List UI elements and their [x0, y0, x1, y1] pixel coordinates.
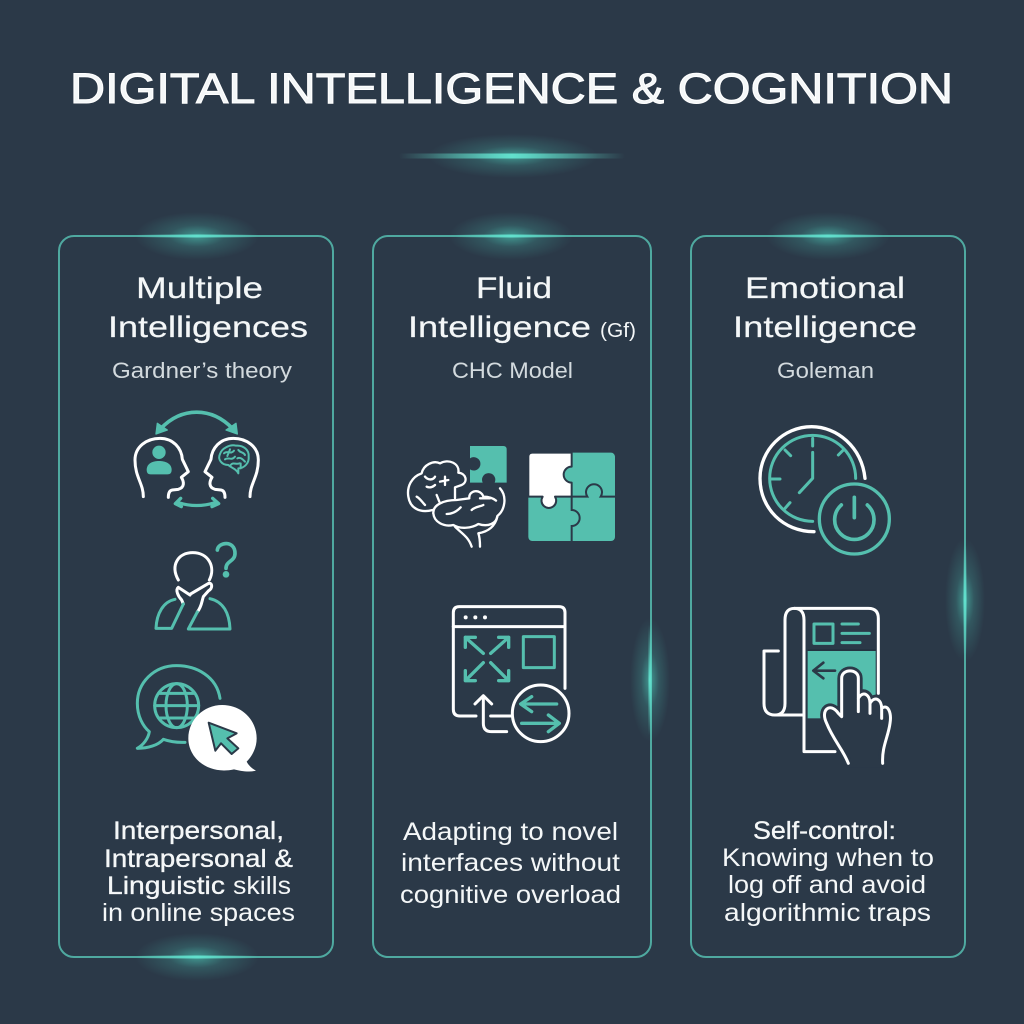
- heading 2: Fluid: [476, 272, 552, 305]
- heading 2: (Gf): [600, 320, 636, 342]
- icon: thinking person: [156, 544, 235, 629]
- body text 2: cognitive overload: [400, 881, 621, 909]
- side glow 2: [630, 618, 670, 742]
- body text 3: Self-control:: [753, 817, 896, 845]
- heading 1: [108, 272, 308, 344]
- subtitle 1: Gardner’s theory: [112, 358, 292, 383]
- heading 3: Emotional: [745, 272, 905, 305]
- title divider glow: [399, 134, 625, 178]
- title: DIGITAL INTELLIGENCE & COGNITION: [70, 65, 953, 113]
- body text 3: Knowing when to: [722, 844, 934, 872]
- heading 3: [733, 272, 917, 344]
- body text 1: [102, 817, 295, 927]
- body text 3: log off and avoid: [728, 871, 926, 899]
- heading 1: Multiple: [136, 272, 263, 305]
- icon: clock with power button: [760, 427, 889, 554]
- panel: fluid intelligence: [373, 212, 670, 957]
- top glow 1: [135, 212, 259, 260]
- top glow 3: [766, 212, 890, 260]
- body text 2: interfaces without: [401, 849, 620, 877]
- body text 1: in online spaces: [102, 899, 295, 927]
- heading 1: Intelligences: [108, 311, 308, 344]
- subtitle 3: Goleman: [777, 358, 874, 383]
- body text 3: algorithmic traps: [724, 899, 931, 927]
- panel: emotional intelligence: [691, 212, 985, 957]
- body text 2: [400, 818, 621, 909]
- heading 2: [408, 272, 636, 344]
- icon: brain with puzzle piece: [408, 446, 507, 547]
- subtitle 2: CHC Model: [452, 358, 573, 383]
- heading 3: Intelligence: [733, 311, 917, 344]
- card frame 3: [691, 236, 965, 957]
- body text 3: [722, 817, 934, 927]
- body text 1: Intrapersonal &: [104, 845, 293, 873]
- card frame 2: [373, 236, 651, 957]
- icon: globe chat with cursor: [137, 666, 257, 772]
- panel: multiple intelligences: [59, 212, 333, 981]
- icon: document with swiping hand: [764, 608, 890, 763]
- body text 1: Interpersonal,: [113, 817, 284, 845]
- body text 2: Adapting to novel: [403, 818, 618, 846]
- heading 2: Intelligence: [408, 311, 591, 344]
- icon: adaptive window: [453, 607, 569, 742]
- card frame 1: [59, 236, 333, 957]
- icon: four piece puzzle: [528, 453, 615, 541]
- top glow 2: [449, 212, 573, 260]
- side glow 3: [945, 538, 985, 662]
- bottom glow 1: [135, 933, 259, 981]
- body text 1: Linguistic: [107, 872, 225, 900]
- body text 1: skills: [233, 872, 291, 900]
- icon: two heads exchanging: [135, 412, 258, 507]
